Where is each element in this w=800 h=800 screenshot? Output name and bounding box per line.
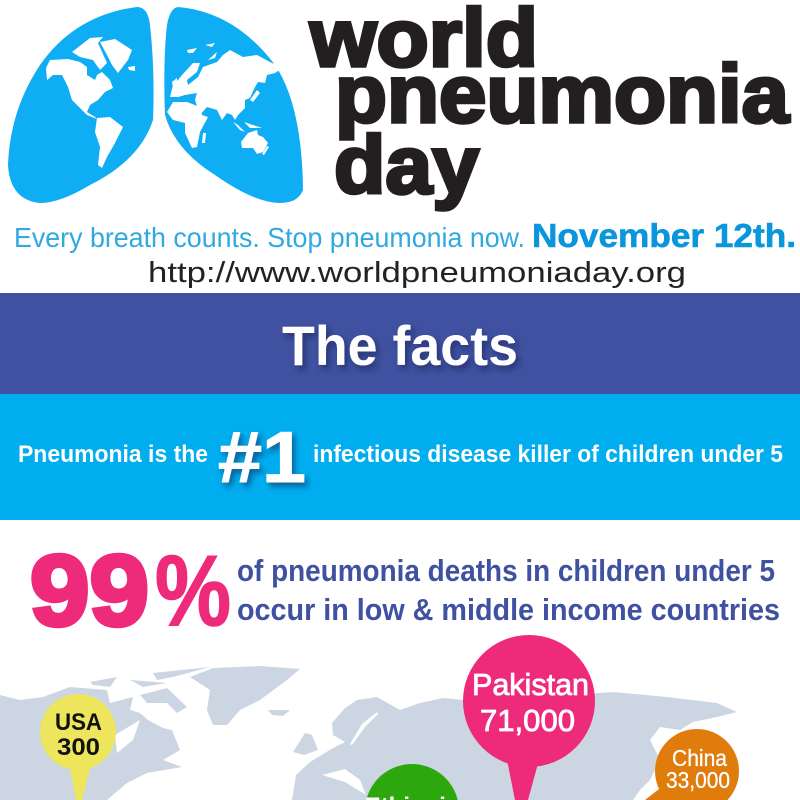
label: China 33,000: [666, 745, 730, 793]
label: China 33,000: China: [672, 745, 727, 771]
title: world pneumonia day: [309, 0, 790, 211]
text: infectious disease killer: infectious disease killer of children under 5: [313, 441, 783, 468]
tagline: Every breath counts. Stop pneumonia now.: [14, 222, 525, 253]
label: Pakistan 71,000: Pakistan: [472, 667, 589, 702]
label: Pakistan 71,000: 71,000: [480, 703, 575, 738]
map water cut-outs: [115, 712, 378, 795]
label: Pakistan 71,000: [472, 667, 589, 738]
title: world pneumonia day: day: [334, 120, 479, 211]
heading: The facts: The facts: [282, 314, 518, 377]
pin: Pakistan: [463, 635, 595, 800]
text: pneumonia is the: Pneumonia is the: [18, 441, 208, 468]
statistic: 99%: 99: [30, 535, 149, 647]
pin: USA: [40, 694, 116, 800]
label: USA 300: [55, 709, 102, 761]
date: November 12th.: [532, 217, 796, 254]
label: China 33,000: 33,000: [666, 767, 730, 793]
pin: China: [645, 729, 739, 800]
pin: Ethiopia: [365, 764, 460, 800]
big number 1: #1: [218, 418, 306, 498]
statistic description: [237, 553, 780, 627]
statistic: 99%: %: [155, 535, 231, 647]
white continents: [46, 37, 283, 168]
title: world pneumonia day: pneumonia: [335, 49, 790, 140]
left lung: [8, 7, 154, 203]
label: USA 300: 300: [57, 734, 100, 761]
website url: http://www.worldpneumoniaday.org: [148, 257, 686, 289]
banner: the facts: [0, 293, 800, 394]
label: USA 300: USA: [55, 709, 102, 736]
panel: number one killer: [0, 394, 800, 520]
world map: [0, 666, 737, 800]
icon: lungs with world map: [8, 7, 303, 203]
right lung: [164, 7, 303, 203]
statistic: 99%: [30, 535, 231, 647]
